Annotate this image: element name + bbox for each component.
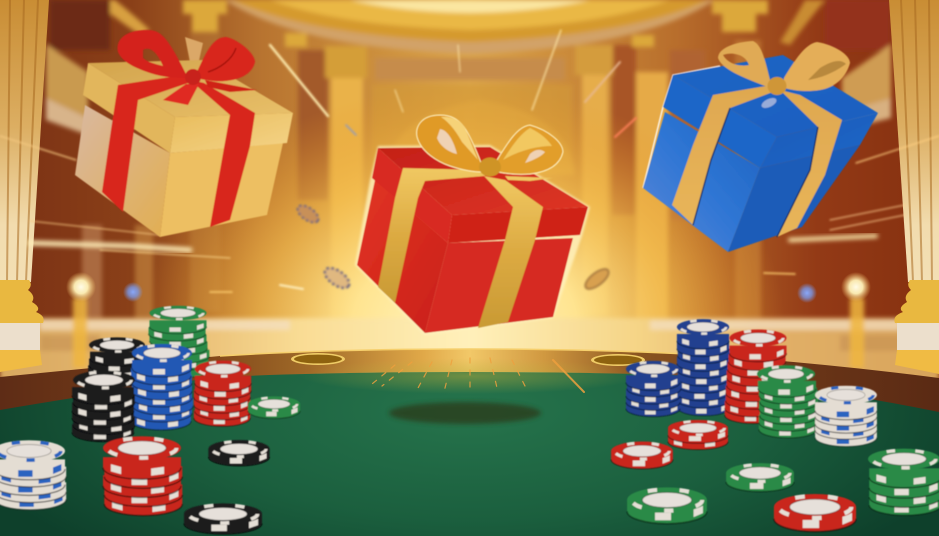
background: palace hall xyxy=(0,0,939,385)
left chip group xyxy=(0,306,300,534)
lid xyxy=(83,60,293,153)
box body xyxy=(643,112,860,252)
box body xyxy=(75,105,283,237)
table rim xyxy=(0,349,939,414)
left column xyxy=(0,0,49,372)
red gift box with gold ribbon xyxy=(355,115,590,335)
light streaks xyxy=(0,30,939,292)
gift shadow xyxy=(389,402,541,424)
central glow xyxy=(0,0,939,385)
white edge highlight xyxy=(643,66,720,188)
lid xyxy=(372,147,588,243)
blue stack xyxy=(131,344,193,430)
green flat chip xyxy=(248,396,300,418)
green stack back xyxy=(149,306,209,378)
green flat chip front xyxy=(627,487,707,524)
upper capitals xyxy=(183,0,768,47)
lid xyxy=(663,55,878,168)
lid glint xyxy=(760,96,778,110)
green stack xyxy=(757,365,818,438)
right column xyxy=(889,0,939,374)
bright outline glow xyxy=(355,145,590,335)
green flat chip middle xyxy=(726,463,794,492)
red bow xyxy=(117,30,257,105)
right chip group xyxy=(611,319,939,532)
blue gift box with gold ribbon xyxy=(643,41,878,252)
black flat chip xyxy=(208,440,270,466)
gold bow xyxy=(718,41,850,95)
red short stack xyxy=(668,420,728,450)
gold gift box with red ribbon xyxy=(75,30,293,237)
red stack back xyxy=(194,361,251,426)
gold ribbon xyxy=(672,85,842,237)
red flat chip left xyxy=(611,442,673,469)
box body xyxy=(357,180,573,333)
sparks on felt xyxy=(372,358,584,394)
red flat chip front xyxy=(774,494,856,532)
blue white stack right xyxy=(815,386,877,446)
table felt xyxy=(0,372,939,536)
ceiling arch xyxy=(92,0,825,54)
red ribbon xyxy=(102,74,255,227)
red stack tall xyxy=(725,329,786,424)
black stack back xyxy=(88,337,146,387)
gold cup holder right xyxy=(591,354,645,366)
gold cup holder left xyxy=(291,353,345,365)
navy stack short xyxy=(626,361,681,417)
dark wall panels xyxy=(50,0,890,220)
back bow loop xyxy=(185,37,203,65)
mid columns xyxy=(82,32,761,323)
lamps xyxy=(66,272,871,303)
gold bow xyxy=(417,115,563,181)
black flat chip front xyxy=(184,503,262,534)
floating blurred chips xyxy=(295,202,612,292)
entablatures xyxy=(46,44,88,118)
ribbon shadow edges xyxy=(693,108,818,237)
glow on felt xyxy=(300,358,640,394)
blue white stack xyxy=(0,440,66,510)
central lattice xyxy=(372,85,572,175)
green stack corner xyxy=(868,449,939,515)
red stack front xyxy=(103,436,182,516)
gold ribbon xyxy=(378,168,543,328)
navy stack tall xyxy=(676,319,730,416)
floor xyxy=(0,298,939,383)
black stack front xyxy=(72,371,135,442)
